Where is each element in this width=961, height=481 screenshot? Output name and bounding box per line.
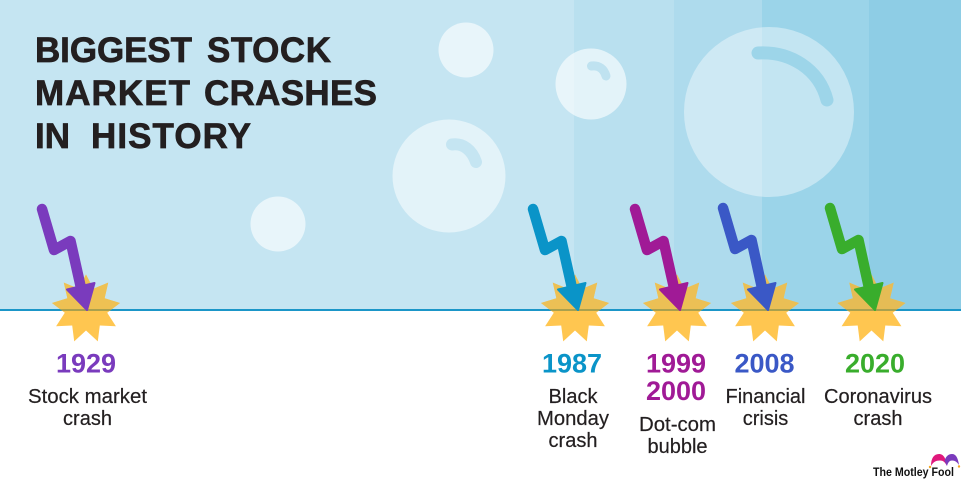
title: STOCK xyxy=(207,31,331,70)
label 1987: crash xyxy=(549,430,597,452)
white ground xyxy=(0,310,961,481)
label 2008 xyxy=(726,386,806,430)
label 2020: Coronavirus xyxy=(824,386,932,408)
bubble: largest right with highlight xyxy=(684,27,854,197)
label 1929 xyxy=(28,386,147,430)
burst 2008 xyxy=(731,274,799,341)
year 1999-2000: 1999 xyxy=(646,348,706,378)
year 2020: 2020 xyxy=(845,348,905,378)
logo: The Motley Fool xyxy=(873,454,960,479)
label 2020: crash xyxy=(854,408,902,430)
year 1999-2000 xyxy=(646,348,706,406)
arrow 2008 xyxy=(723,208,776,310)
label 2008: Financial xyxy=(726,386,806,408)
arrow 2020 xyxy=(830,208,882,310)
year 1929: 1929 xyxy=(56,348,116,378)
bubble: small top xyxy=(438,22,494,78)
year 1999-2000: 2000 xyxy=(646,376,706,406)
event 2008 xyxy=(723,208,806,430)
bubble: large left with highlight xyxy=(392,120,506,232)
arrow 1987 xyxy=(533,209,586,310)
label 1987 xyxy=(537,386,609,452)
burst 1987 xyxy=(541,274,609,341)
event 2020 xyxy=(824,208,932,430)
arrow 1929 xyxy=(42,209,94,310)
year 2008: 2008 xyxy=(734,348,795,378)
event 1999-2000 xyxy=(635,209,716,458)
label dot-com xyxy=(639,414,716,458)
label dot-com: bubble xyxy=(647,436,708,458)
title: MARKET xyxy=(35,74,190,113)
burst 2020 xyxy=(838,274,906,341)
arrow 1999 xyxy=(635,209,688,310)
label 2020 xyxy=(824,386,932,430)
label 1929: Stock market xyxy=(28,386,147,408)
label 1987: Black xyxy=(549,386,598,408)
label 2008: crisis xyxy=(743,408,788,430)
title: CRASHES xyxy=(204,74,377,113)
label 1987: Monday xyxy=(537,408,609,430)
label dot-com: Dot-com xyxy=(639,414,716,436)
title: BIGGEST xyxy=(35,31,192,70)
title: HISTORY xyxy=(91,117,251,156)
icon: jester hat xyxy=(929,454,960,468)
title: IN xyxy=(35,117,70,156)
burst 1999 xyxy=(643,274,711,341)
baseline xyxy=(0,309,961,311)
burst 1929 xyxy=(52,274,120,341)
bubble: medium with highlight xyxy=(556,48,626,120)
title xyxy=(35,31,377,156)
bubble: small lower xyxy=(250,196,306,252)
event 1987 xyxy=(533,209,609,452)
wordmark: The Motley Fool xyxy=(873,467,954,479)
year 1987: 1987 xyxy=(542,348,602,378)
label 1929: crash xyxy=(63,408,112,430)
event 1929 xyxy=(28,209,147,430)
panel: sky background bands xyxy=(0,0,961,310)
